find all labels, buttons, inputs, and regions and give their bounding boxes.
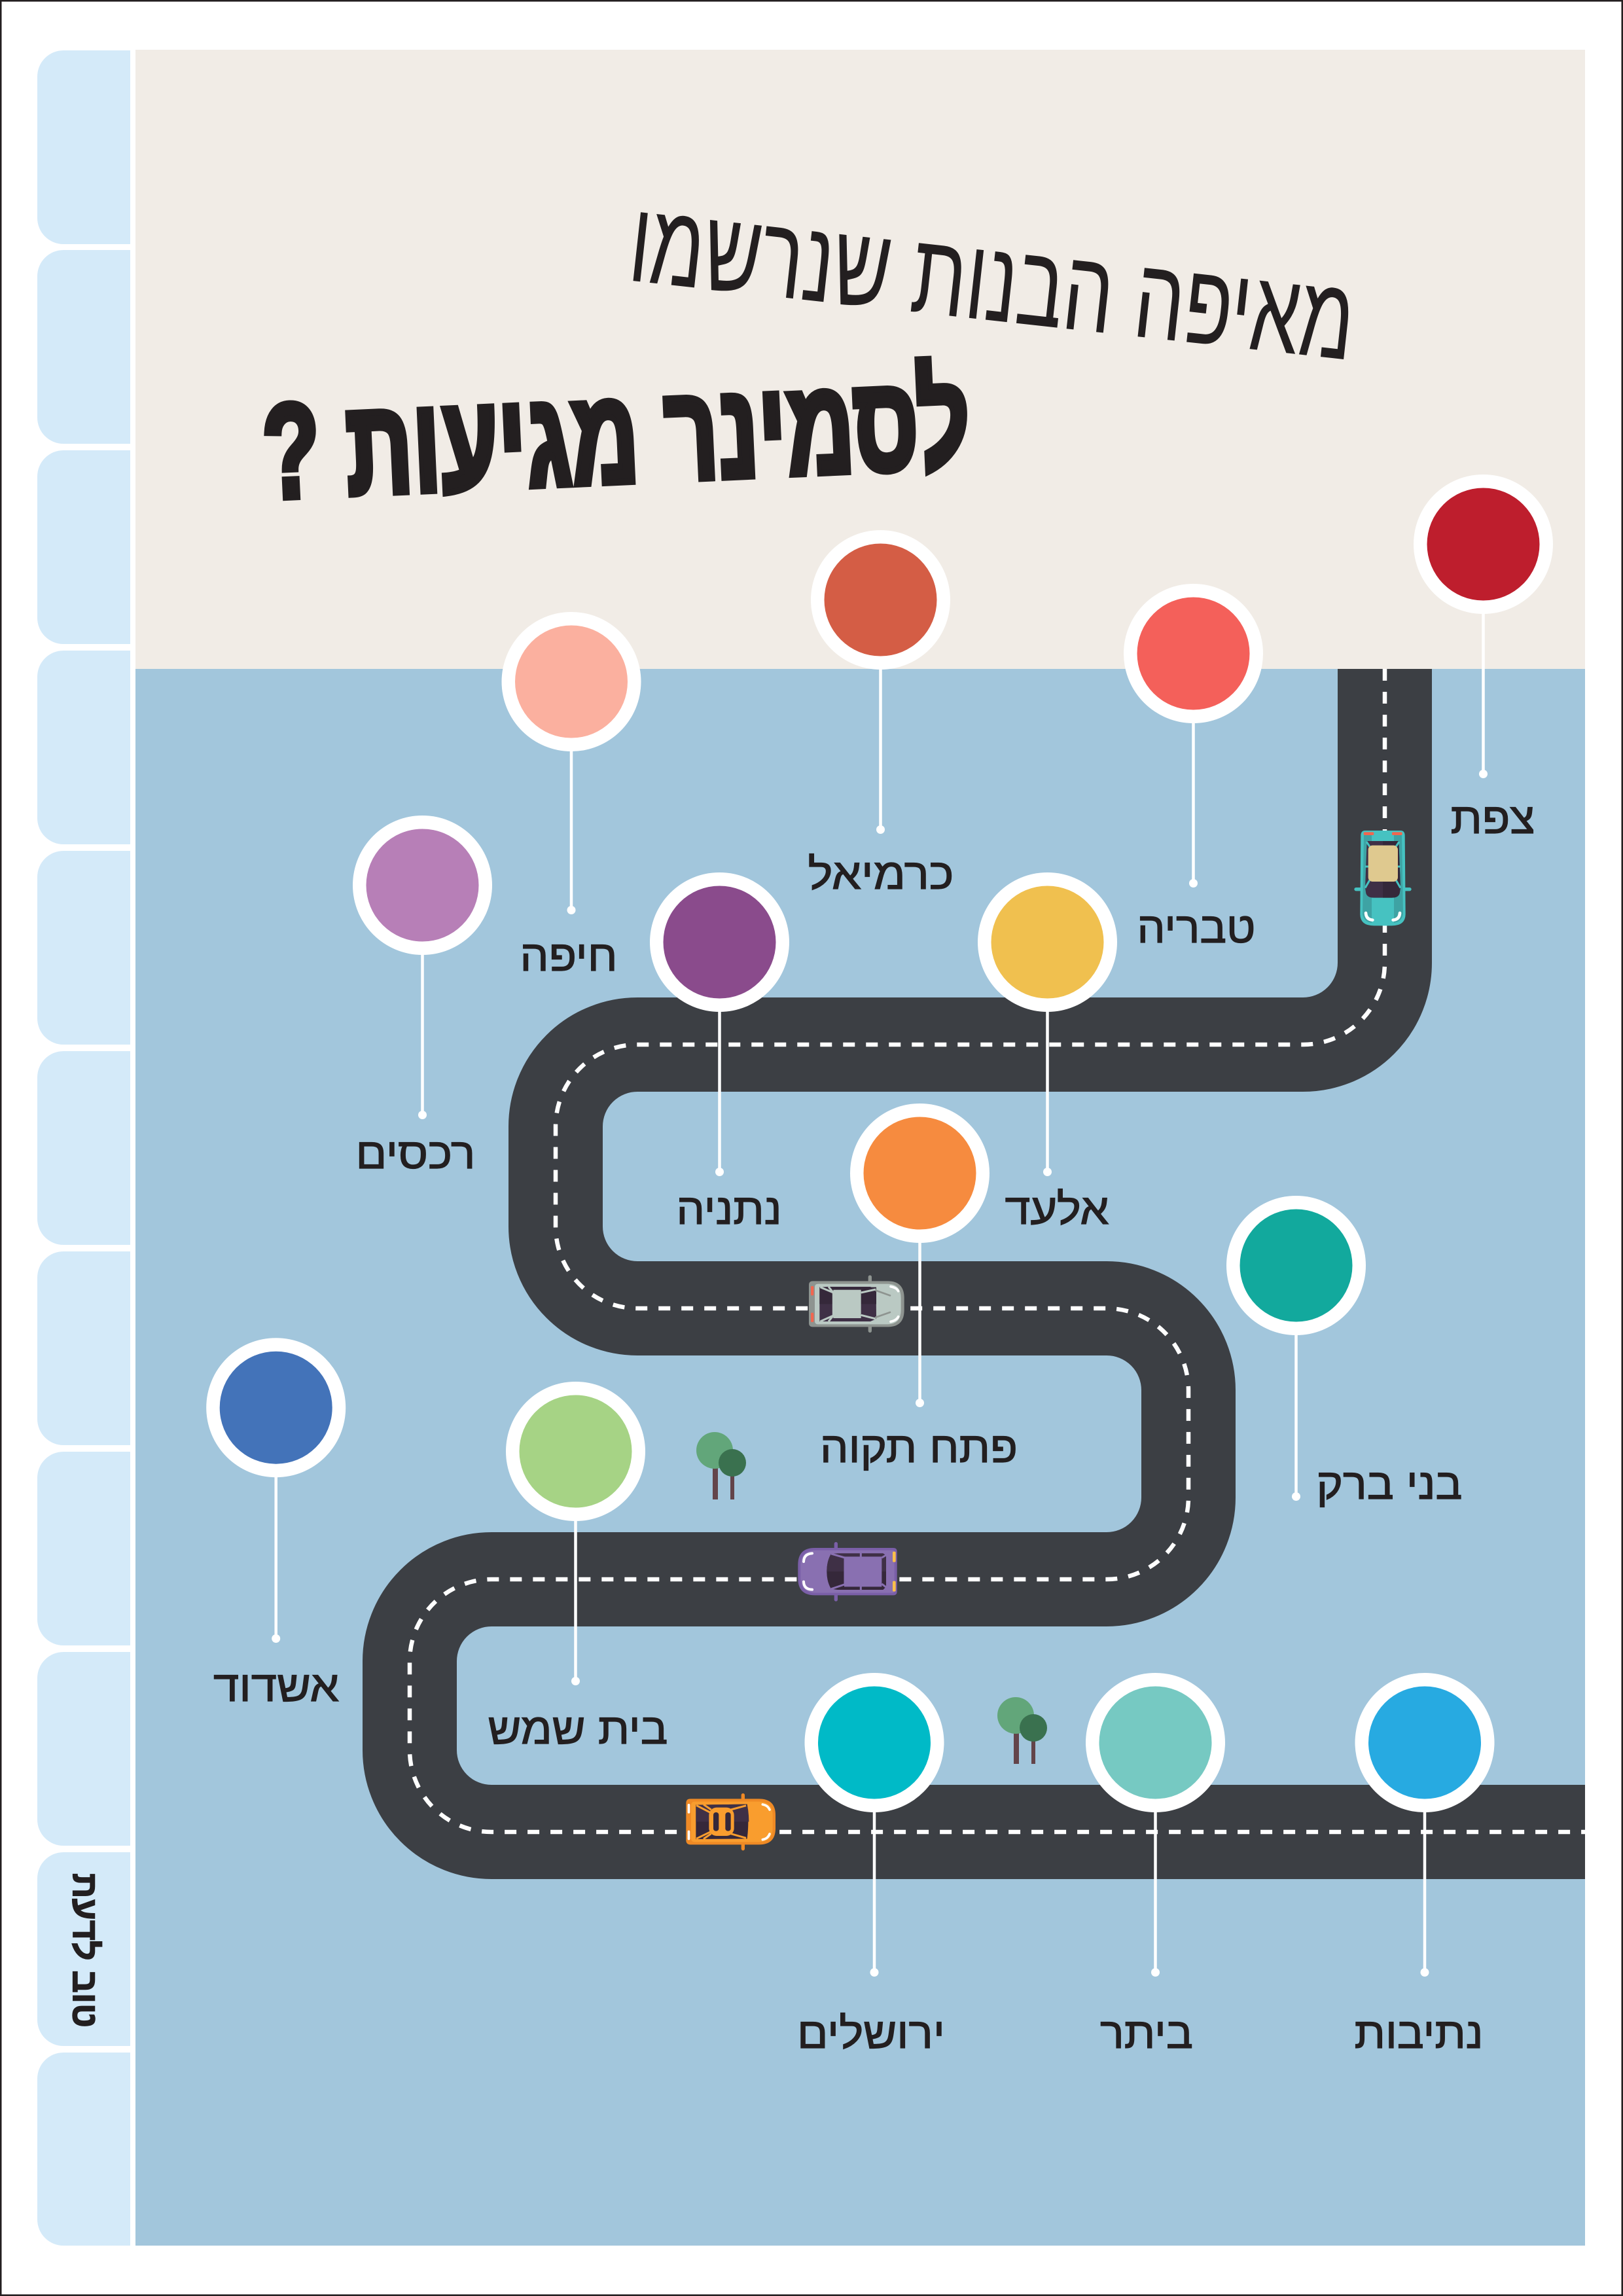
pin: Ashdod	[206, 1338, 346, 1710]
car: orange taxi	[686, 1793, 776, 1850]
pin: Jerusalem: ירושלים	[797, 2009, 945, 2057]
pin: Beitar: ביתר	[1100, 2009, 1193, 2057]
pin: Netanya: נתניה	[677, 1185, 781, 1233]
pin: Safed: צפת	[1450, 794, 1535, 842]
pin: Elad: אלעד	[1005, 1185, 1109, 1233]
pin: Beitar	[1086, 1673, 1225, 2057]
title line 2: לסמינר מגיעות ?	[260, 346, 973, 527]
car: silver	[809, 1275, 904, 1333]
pin: Petah Tikva	[820, 1103, 1018, 1471]
pin: Ashdod: אשדוד	[213, 1662, 339, 1710]
pin: Beit Shemesh: בית שמש	[488, 1704, 668, 1753]
pin: Bnei Brak: בני ברק	[1317, 1460, 1462, 1508]
pin: Haifa	[501, 612, 641, 980]
car: purple	[798, 1542, 897, 1602]
side tab label: טוב לדעת	[65, 1873, 105, 2028]
pin: Elad	[978, 872, 1117, 1233]
winding road	[410, 669, 1585, 1832]
pin: Rekhasim: רכסים	[356, 1129, 475, 1177]
pin: Jerusalem	[797, 1673, 945, 2057]
pin: Beit Shemesh	[488, 1382, 668, 1753]
pin: Petah Tikva: פתח תקוה	[820, 1423, 1018, 1471]
pin: Netanya	[650, 872, 789, 1233]
pin: Tiberias	[1124, 584, 1263, 952]
pin: Netivot	[1355, 1673, 1495, 2057]
trees: lower	[997, 1697, 1047, 1764]
pin: Netivot: נתיבות	[1355, 2009, 1483, 2057]
side tabs column	[37, 50, 130, 2246]
pin: Safed	[1414, 475, 1553, 842]
map panel: blue background	[135, 669, 1585, 2246]
pin: Bnei Brak	[1226, 1196, 1462, 1508]
pin: Tiberias: טבריה	[1137, 903, 1255, 952]
pin: Karmiel	[808, 530, 954, 898]
trees: upper	[696, 1432, 746, 1499]
pin: Rekhasim	[353, 816, 492, 1177]
header panel: beige background	[135, 50, 1585, 669]
pin: Haifa: חיפה	[520, 931, 618, 980]
car: teal	[1354, 831, 1412, 925]
pin: Karmiel: כרמיאל	[808, 850, 954, 898]
